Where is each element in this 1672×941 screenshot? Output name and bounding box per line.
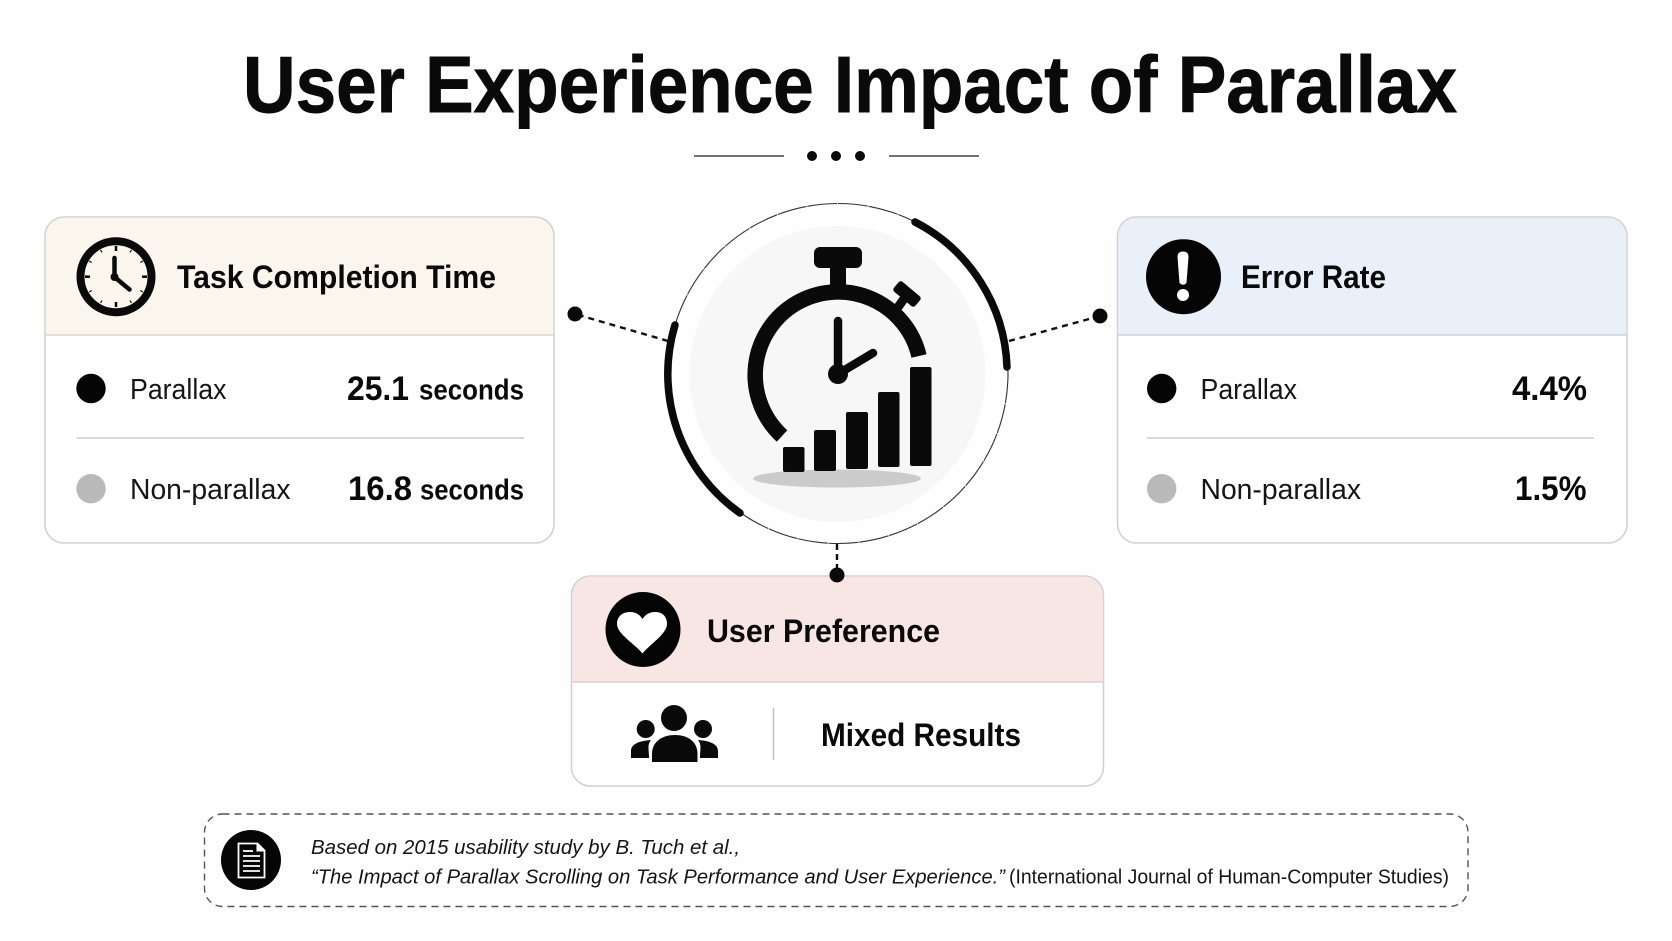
label: parallax: Parallax <box>130 374 227 406</box>
note line 2 <box>311 866 1449 888</box>
label: parallax: Parallax <box>1200 374 1297 406</box>
legend dot: parallax <box>76 374 106 403</box>
hub dashed ring <box>668 204 1008 544</box>
title: User Experience Impact of Parallax <box>243 40 1457 129</box>
source note <box>204 814 1468 906</box>
panel: task completion time <box>45 217 554 543</box>
value: parallax error: 4.4% <box>1512 370 1587 408</box>
central hub <box>668 204 1008 544</box>
label: non-parallax: Non-parallax <box>1200 474 1361 506</box>
card header <box>46 218 553 335</box>
note line 2: (International Journal of Human-Computer Studies) <box>1009 866 1449 888</box>
note line 2: “The Impact of Parallax Scrolling on Task Performance and User Experience.” <box>311 866 1006 888</box>
card heading: Error Rate <box>1241 259 1386 295</box>
chart shadow <box>753 470 921 488</box>
card heading: User Preference <box>707 613 940 649</box>
hub pale disc <box>690 226 986 522</box>
value: parallax time: 25.1 <box>347 370 409 408</box>
icon: people <box>631 705 718 762</box>
connector: right card to hub <box>1009 308 1108 341</box>
hub thick arc left <box>668 325 740 513</box>
value: parallax time: seconds <box>419 374 524 406</box>
value: non-parallax time <box>348 470 524 508</box>
card header <box>1118 218 1626 335</box>
value: non-parallax time: seconds <box>420 474 524 506</box>
connector: left card to hub <box>568 306 668 341</box>
note line 1: Based on 2015 usability study by B. Tuch et al., <box>311 836 740 859</box>
connector dot: hub to bottom card <box>830 568 844 582</box>
legend dot: non-parallax <box>76 474 106 503</box>
value: parallax time <box>347 370 524 408</box>
icon: clock <box>80 241 152 312</box>
card header <box>572 577 1103 682</box>
legend dot: non-parallax <box>1147 474 1176 503</box>
result text: Mixed Results <box>821 717 1021 753</box>
connector: hub to bottom card <box>836 544 838 572</box>
value: non-parallax error: 1.5% <box>1515 470 1586 508</box>
icon: exclamation <box>1146 239 1221 314</box>
value: non-parallax time: 16.8 <box>348 470 412 508</box>
icon: rising bars <box>783 367 932 472</box>
icon: stopwatch <box>755 247 922 436</box>
legend dot: parallax <box>1147 374 1176 403</box>
note dashed frame <box>204 814 1468 906</box>
title ornament <box>694 151 979 161</box>
icon: heart <box>606 592 680 667</box>
card body <box>1118 217 1627 543</box>
card body <box>45 217 554 543</box>
panel: user preference <box>572 576 1104 786</box>
label: non-parallax: Non-parallax <box>130 474 291 506</box>
card body <box>572 576 1104 786</box>
hub thick arc top right <box>915 222 1007 367</box>
card heading: Task Completion Time <box>177 259 496 295</box>
icon: document <box>221 830 281 890</box>
panel: error rate <box>1118 217 1627 543</box>
